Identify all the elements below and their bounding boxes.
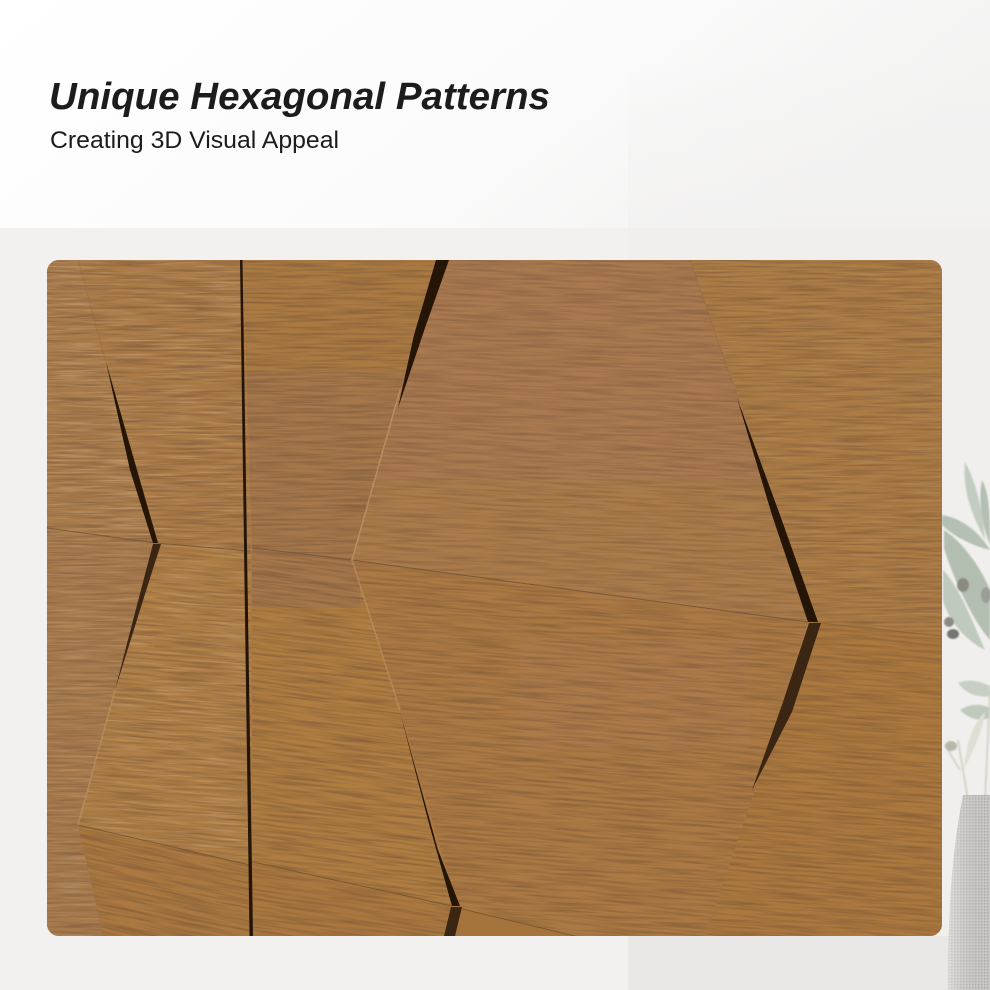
berries	[944, 578, 990, 751]
facet: second column lower	[79, 545, 251, 862]
seams	[47, 260, 942, 936]
facet: far left lower	[47, 528, 152, 936]
facet: second column upper	[80, 260, 251, 550]
gap: right chevron	[737, 398, 818, 622]
facet: right upper	[685, 255, 945, 640]
leaves	[942, 462, 990, 770]
facet: third column bottom	[252, 864, 450, 936]
facet: far left upper	[47, 260, 152, 542]
vase	[948, 795, 990, 990]
stems	[945, 690, 990, 800]
wood panel photo	[47, 260, 942, 936]
gap: upper centre	[398, 260, 449, 408]
subtitle: Creating 3D Visual Appeal	[50, 127, 339, 154]
facet: third column lower	[252, 548, 452, 905]
gap: vertical centre	[240, 260, 253, 936]
plant decoration	[942, 462, 990, 800]
facet: large hexagon upper	[353, 260, 807, 620]
facet: bottom wedge	[456, 910, 571, 936]
title: Unique Hexagonal Patterns	[49, 76, 550, 118]
gap: left chevron	[106, 362, 158, 543]
facet: right lower	[706, 624, 942, 936]
facet: second column bottom	[78, 826, 250, 936]
panel gaps	[106, 260, 821, 936]
facet: large hexagon lower	[354, 562, 808, 936]
gap: lower centre	[400, 712, 460, 906]
facet: third column upper	[240, 255, 445, 565]
